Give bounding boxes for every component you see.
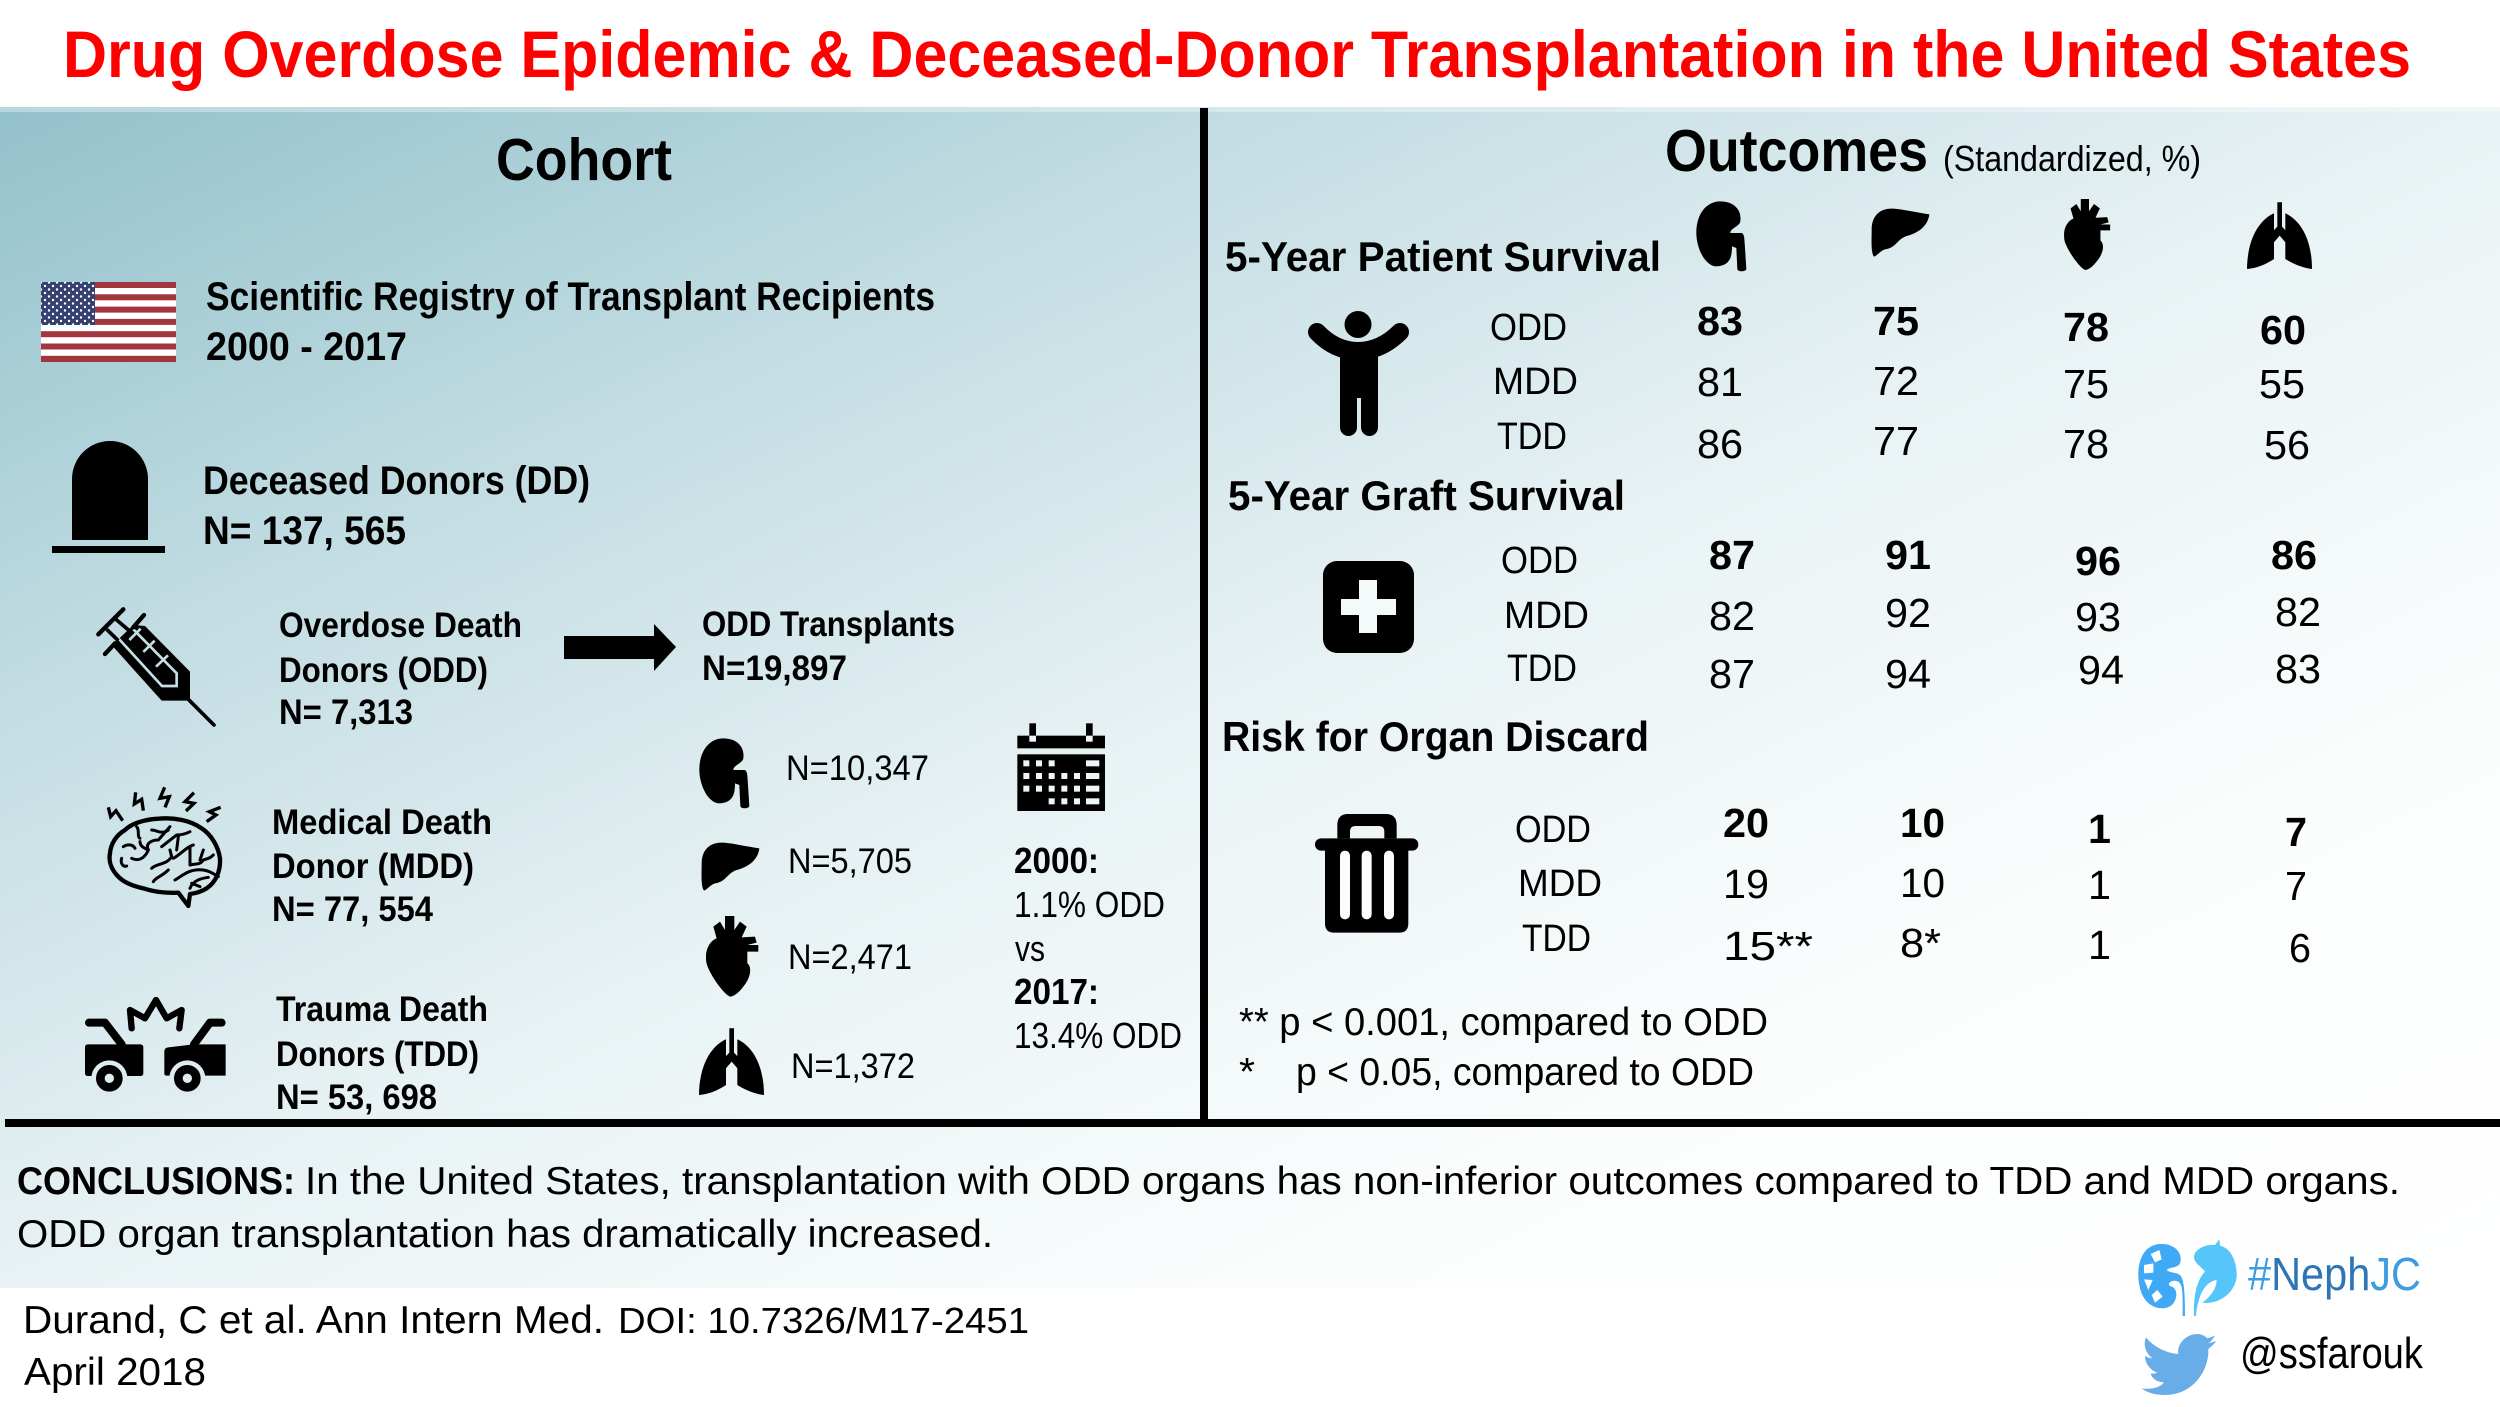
organ discard table: 1 (2088, 806, 2111, 852)
overdose death donors text: Donors (ODD) (279, 651, 488, 690)
heading: 5-year patient survival: 5-Year Patient Survival (1225, 233, 1661, 280)
patient survival table: 72 (1873, 358, 1919, 404)
patient survival table: 56 (2264, 422, 2310, 468)
trauma death donors text (276, 990, 488, 1117)
registry text: Scientific Registry of Transplant Recipients (206, 275, 935, 319)
icon: calendar (1017, 723, 1105, 811)
patient survival table: ODD (1490, 307, 1567, 349)
cohort heading: Cohort (496, 127, 672, 193)
patient survival table: 78 (2063, 304, 2109, 350)
heart count: N=2,471 (788, 938, 912, 977)
icon: twitter bird (2142, 1334, 2216, 1395)
column icon: lungs (2247, 202, 2312, 269)
organ discard table: 1 (2088, 862, 2111, 908)
patient survival table: MDD (1493, 361, 1578, 403)
conclusions: ODD organ transplantation has dramatically increased. (17, 1213, 993, 1256)
icon: tombstone (52, 441, 165, 553)
graft survival table: 92 (1885, 590, 1931, 636)
organ discard table: 20 (1723, 800, 1769, 846)
footnotes: * (1239, 1051, 1255, 1094)
registry text: 2000 - 2017 (206, 325, 407, 369)
icon: heart (706, 916, 758, 997)
medical death donor text: N= 77, 554 (272, 890, 433, 929)
organ discard table: TDD (1522, 918, 1591, 960)
liver count: N=5,705 (788, 842, 912, 881)
organ discard table: 7 (2285, 863, 2307, 909)
organ discard table: 10 (1900, 800, 1945, 846)
citation (23, 1299, 1029, 1394)
deceased donors text: N= 137, 565 (203, 509, 406, 553)
icon: lungs (699, 1028, 764, 1095)
overdose death donors text: N= 7,313 (279, 693, 413, 732)
organ discard table: ODD (1515, 809, 1591, 851)
graft survival table: 87 (1709, 651, 1755, 697)
icon: car crash (85, 1000, 226, 1096)
footnotes: ** p < 0.001, compared to ODD (1239, 1001, 1768, 1044)
organ discard table: 6 (2289, 925, 2311, 971)
twitter handle: @ssfarouk (2240, 1329, 2424, 1378)
ODD share over time: 1.1% ODD (1014, 884, 1165, 925)
graft survival table: 86 (2271, 532, 2317, 578)
heading: risk for organ discard: Risk for Organ Discard (1222, 713, 1649, 760)
citation: DOI: 10.7326/M17-2451 (618, 1300, 1029, 1341)
hashtag NephJC: #NephJC (2248, 1248, 2421, 1300)
citation: Durand, C et al. Ann Intern Med. (23, 1299, 604, 1342)
conclusions: CONCLUSIONS: (17, 1160, 295, 1203)
outcomes heading: Outcomes (1665, 118, 1928, 184)
icon: medical cross (1323, 561, 1414, 653)
footnotes: p < 0.05, compared to ODD (1296, 1051, 1754, 1094)
patient survival table: 60 (2260, 307, 2306, 353)
panel: cohort (41, 127, 1182, 1117)
graft survival table: 83 (2275, 646, 2321, 692)
citation: April 2018 (24, 1351, 206, 1394)
column icon: liver (1872, 209, 1929, 257)
ODD share over time: 13.4% ODD (1014, 1015, 1182, 1056)
registry text (206, 275, 935, 369)
ODD transplants text: ODD Transplants (702, 605, 955, 644)
outcomes heading: (Standardized, %) (1943, 138, 2201, 179)
graft survival table: 94 (2078, 647, 2124, 693)
icon: syringe (98, 609, 214, 725)
graft survival table (1501, 532, 2321, 697)
icon: brain (108, 787, 221, 906)
graft survival table: TDD (1507, 648, 1577, 690)
icon: NephJC kidneys logo (2138, 1239, 2237, 1316)
panel: outcomes (1222, 118, 2321, 1094)
lungs count: N=1,372 (791, 1047, 915, 1086)
outcomes heading (1665, 118, 2201, 184)
graft survival table: 96 (2075, 538, 2121, 584)
ODD share over time: vs (1015, 928, 1045, 969)
column icon: kidney (1696, 201, 1746, 271)
ODD share over time (1014, 840, 1182, 1056)
organ discard table: 7 (2285, 809, 2307, 855)
patient survival table: TDD (1497, 416, 1567, 458)
organ discard table (1515, 800, 2311, 971)
ODD transplants text: N=19,897 (702, 649, 847, 688)
horizontal divider (5, 1119, 2500, 1127)
medical death donor text: Donor (MDD) (272, 847, 474, 886)
patient survival table: 75 (1873, 298, 1919, 344)
organ discard table: 15** (1723, 923, 1813, 969)
organ discard table: 10 (1900, 860, 1945, 906)
vertical divider (1200, 108, 1208, 1123)
deceased donors text: Deceased Donors (DD) (203, 459, 590, 503)
organ discard table: MDD (1518, 863, 1602, 905)
ODD share over time: 2000: (1014, 840, 1099, 881)
conclusions (17, 1160, 2400, 1256)
graft survival table: 82 (2275, 589, 2321, 635)
organ discard table: 1 (2088, 922, 2111, 968)
patient survival table: 81 (1697, 359, 1743, 405)
footnotes (1239, 1001, 1768, 1094)
icon: person (1317, 311, 1400, 436)
trauma death donors text: N= 53, 698 (276, 1078, 437, 1117)
overdose death donors text (279, 606, 522, 732)
arrow to ODD transplants (564, 624, 676, 671)
patient survival table: 83 (1697, 298, 1743, 344)
patient survival table: 55 (2259, 361, 2305, 407)
graft survival table: 91 (1885, 532, 1931, 578)
patient survival table: 77 (1873, 418, 1919, 464)
patient survival table: 86 (1697, 421, 1743, 467)
patient survival table (1490, 298, 2310, 468)
graft survival table: MDD (1504, 595, 1589, 637)
graft survival table: 94 (1885, 651, 1931, 697)
overdose death donors text: Overdose Death (279, 606, 522, 645)
kidney count: N=10,347 (786, 749, 929, 788)
icon: trash can (1315, 814, 1418, 933)
patient survival table: 78 (2063, 421, 2109, 467)
medical death donor text (272, 803, 492, 929)
organ discard table: 19 (1723, 861, 1769, 907)
graft survival table: 93 (2075, 594, 2121, 640)
column icon: heart (2064, 199, 2110, 270)
graft survival table: 87 (1709, 532, 1755, 578)
trauma death donors text: Donors (TDD) (276, 1035, 479, 1074)
ODD share over time: 2017: (1014, 971, 1099, 1012)
icon: liver (702, 843, 759, 891)
heading: 5-year graft survival: 5-Year Graft Survival (1228, 472, 1625, 519)
icon: kidney (699, 738, 749, 808)
icon: US flag (41, 282, 176, 362)
medical death donor text: Medical Death (272, 803, 492, 842)
conclusions: In the United States, transplantation with ODD organs has non-inferior outcomes compared to TDD and MDD organs. (305, 1160, 2400, 1203)
organ discard table: 8* (1900, 920, 1941, 966)
patient survival table: 75 (2063, 361, 2109, 407)
graft survival table: 82 (1709, 593, 1755, 639)
ODD transplants text (702, 605, 955, 688)
graft survival table: ODD (1501, 540, 1578, 582)
deceased donors text (203, 459, 590, 553)
trauma death donors text: Trauma Death (276, 990, 488, 1029)
